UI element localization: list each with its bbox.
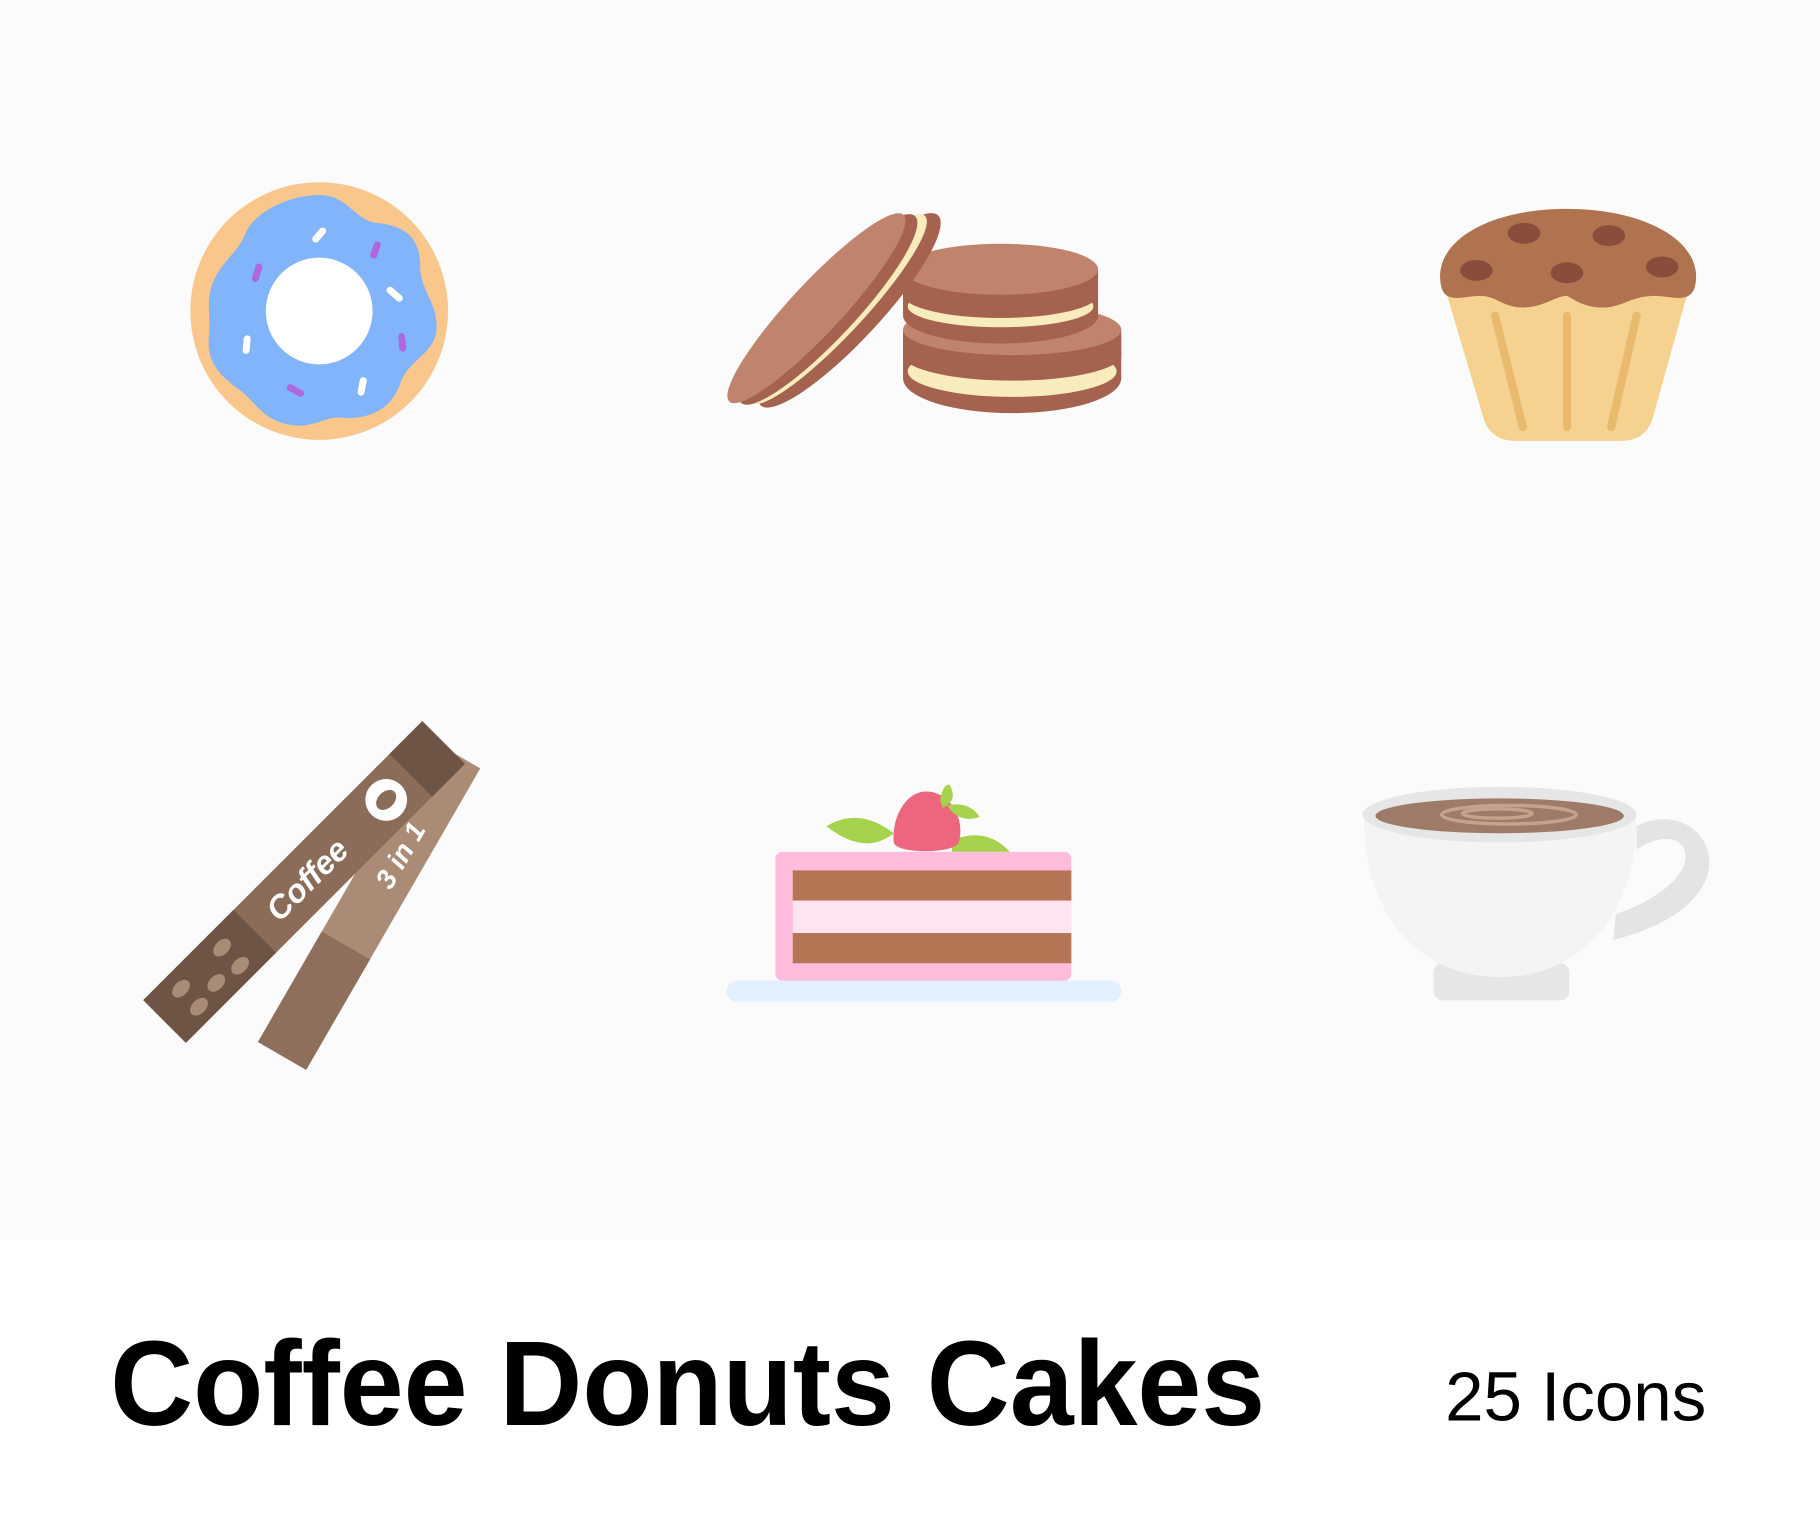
icon: coffee sticks: Coffee xyxy=(259,831,355,928)
icon: coffee sticks: 3 in 1 xyxy=(369,817,432,894)
icon: layer cake xyxy=(727,785,1121,1002)
icon: coffee sticks xyxy=(143,721,480,1070)
icon: sandwich cookies xyxy=(711,180,1121,440)
icon: coffee cup xyxy=(1363,787,1709,1000)
title: Coffee Donuts Cakes xyxy=(110,1316,1265,1451)
icon: muffin xyxy=(1440,209,1696,441)
icon: donut xyxy=(190,182,448,440)
subtitle: icon count: 25 Icons xyxy=(1445,1357,1706,1435)
